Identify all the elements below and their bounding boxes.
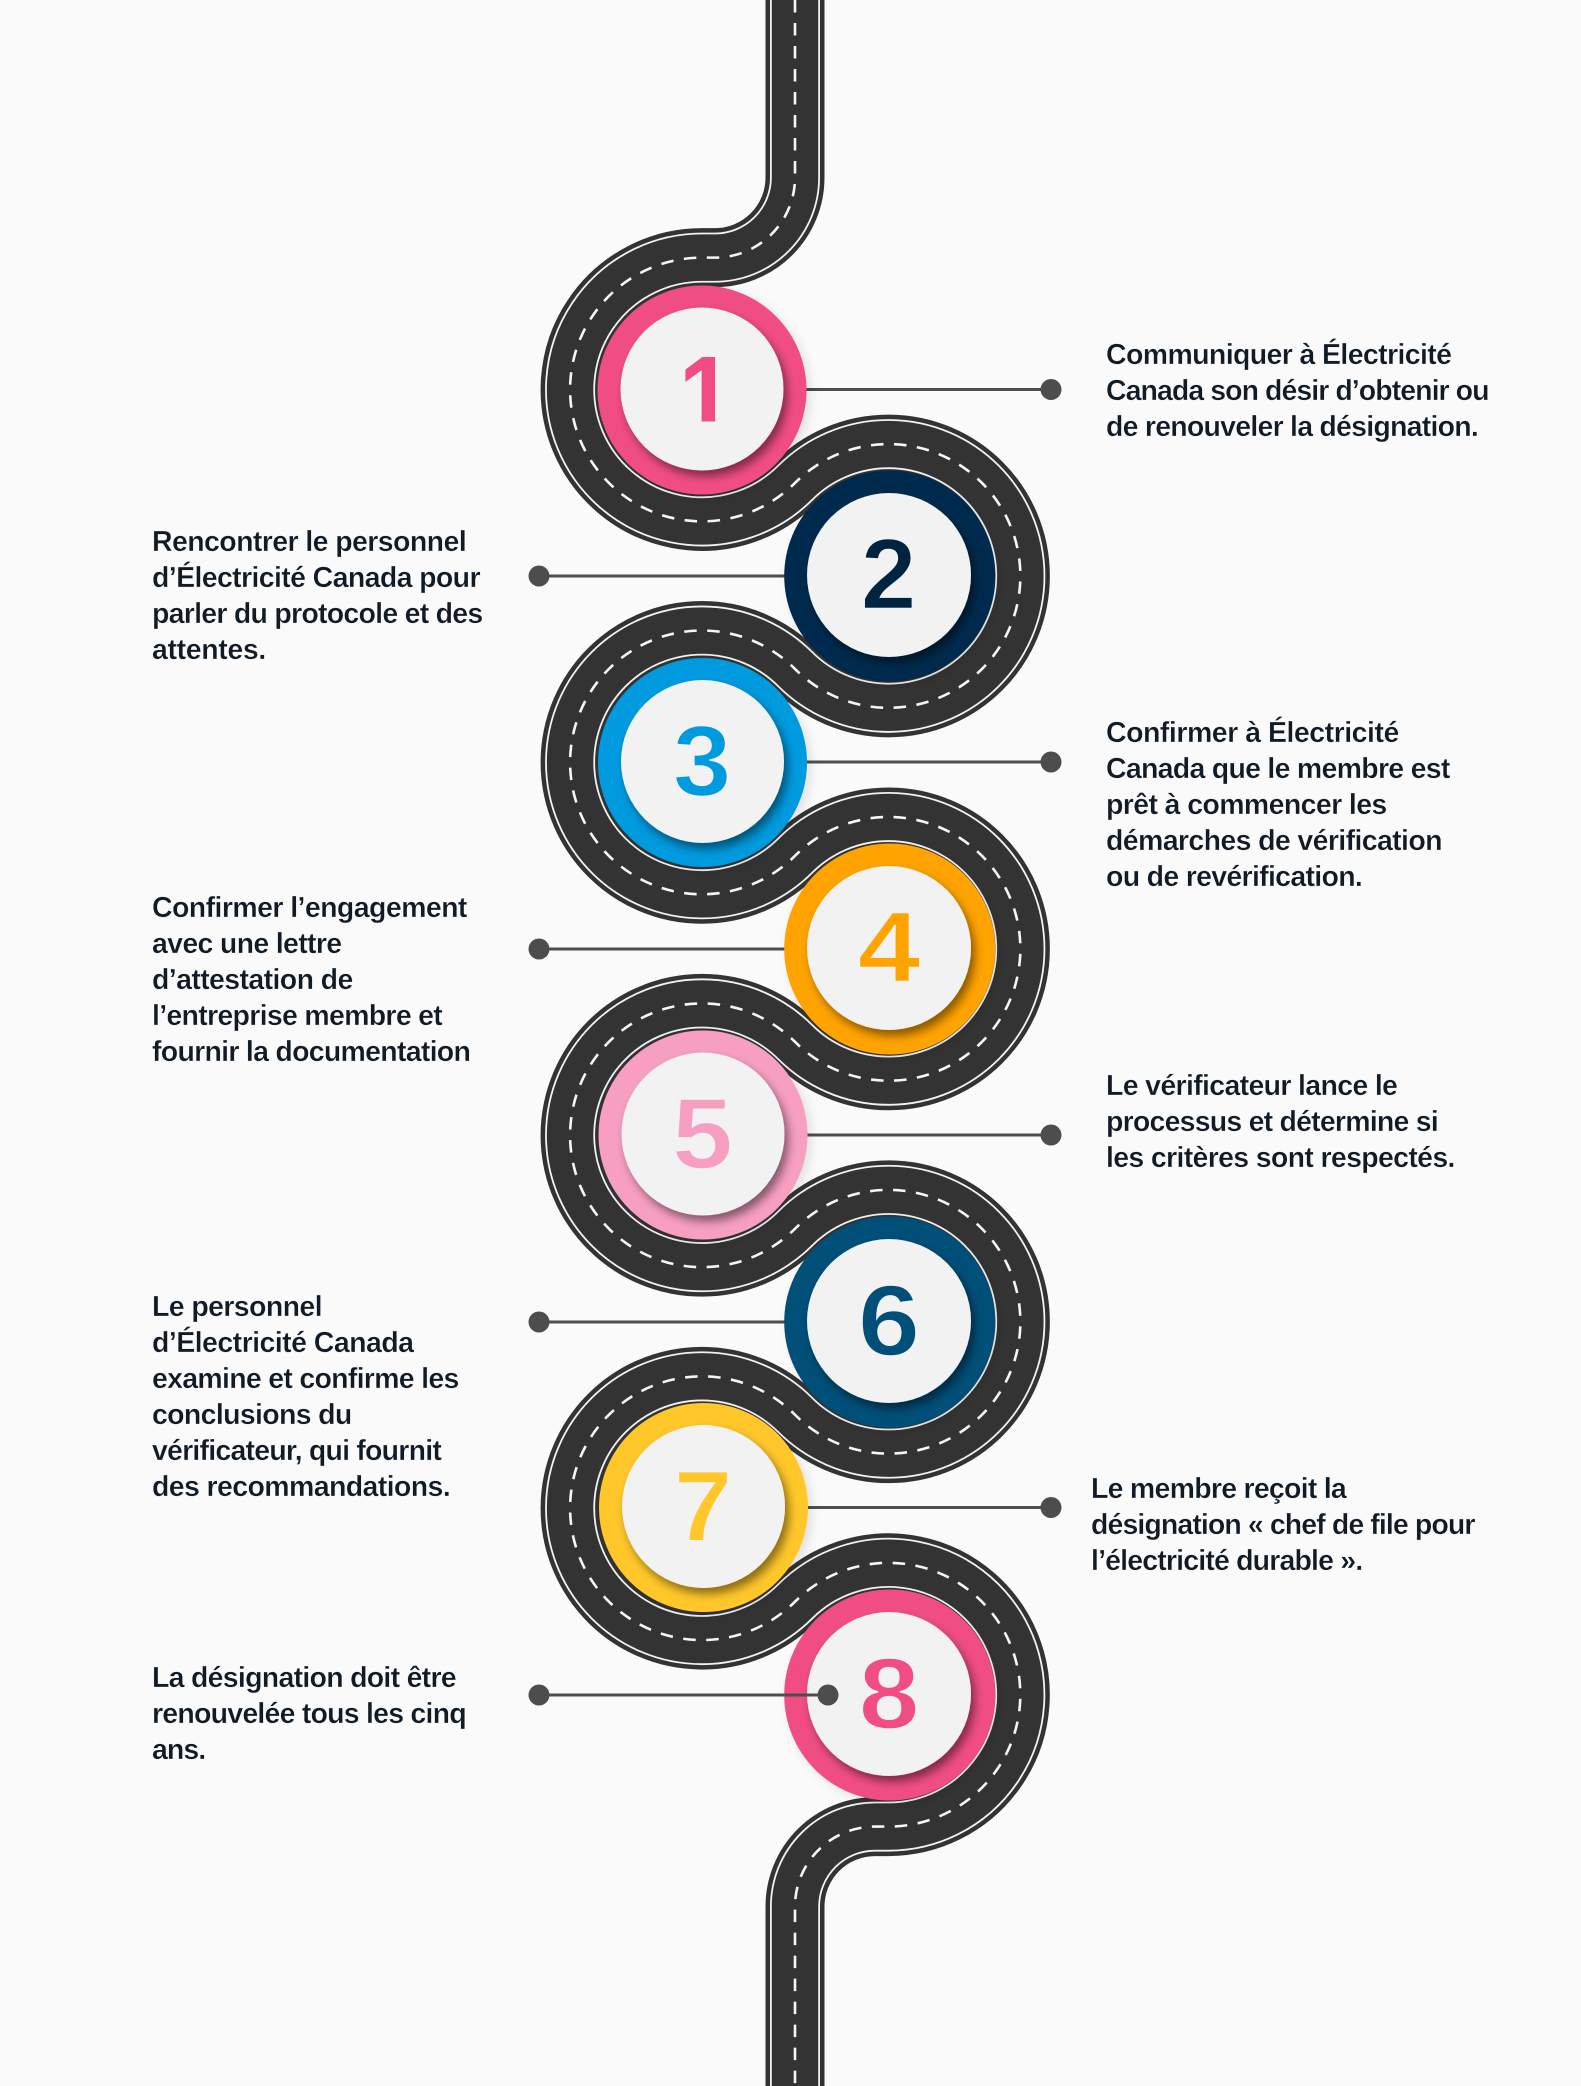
text step 5 xyxy=(1106,1070,1455,1174)
text step 2: d’Électricité Canada pour xyxy=(152,562,480,594)
text step 3: prêt à commencer les xyxy=(1106,789,1387,821)
connector step 8 xyxy=(528,1684,838,1706)
connector step 5 xyxy=(800,1124,1062,1146)
connector step 7 xyxy=(800,1497,1062,1518)
road diagram with numbered steps xyxy=(528,0,1062,2086)
text step 1: de renouveler la désignation. xyxy=(1106,411,1478,443)
text step 2: parler du protocole et des xyxy=(152,598,482,630)
text step 2: Rencontrer le personnel xyxy=(152,526,466,558)
step 8 badge xyxy=(784,1590,995,1800)
text step 7: l’électricité durable ». xyxy=(1091,1545,1362,1577)
step 1 badge xyxy=(598,286,806,494)
text step 8: ans. xyxy=(152,1734,205,1766)
text step 3: Confirmer à Électricité xyxy=(1106,717,1399,749)
step 5 badge xyxy=(598,1030,808,1240)
connector step 2 xyxy=(528,566,790,586)
text step 4: l’entreprise membre et xyxy=(152,1000,442,1032)
step 7 badge: 7 xyxy=(674,1450,732,1562)
text step 3: ou de revérification. xyxy=(1106,861,1362,893)
text step 8: La désignation doit être xyxy=(152,1662,456,1694)
text step 6 xyxy=(152,1291,459,1503)
text step 6: conclusions du xyxy=(152,1399,352,1431)
text step 3: démarches de vérification xyxy=(1106,825,1442,857)
step 3 badge xyxy=(598,658,807,867)
connector step 1 xyxy=(800,379,1062,400)
step 2 badge xyxy=(784,470,995,682)
step 2 badge: 2 xyxy=(861,518,916,630)
text step 4: avec une lettre xyxy=(152,928,341,960)
connector step 3 xyxy=(800,752,1062,772)
text step 2: attentes. xyxy=(152,634,266,666)
text step 6: d’Électricité Canada xyxy=(152,1327,413,1359)
text step 4: fournir la documentation xyxy=(152,1036,470,1068)
step 4 badge xyxy=(784,844,995,1054)
connector step 6 xyxy=(528,1312,790,1332)
text step 1 xyxy=(1106,338,1489,443)
step 7 badge xyxy=(599,1403,808,1612)
text step 3: Canada que le membre est xyxy=(1106,753,1450,785)
text step 7: désignation « chef de file pour xyxy=(1091,1509,1475,1541)
step 8 badge: 8 xyxy=(859,1638,919,1750)
winding road xyxy=(570,0,1020,2086)
text step 1: Canada son désir d’obtenir ou xyxy=(1106,375,1489,407)
text step 5: les critères sont respectés. xyxy=(1106,1142,1455,1174)
text step 1: Communiquer à Électricité xyxy=(1106,339,1451,371)
text step 3 xyxy=(1106,716,1450,893)
text step 8 xyxy=(152,1662,466,1766)
text step 7 xyxy=(1091,1473,1476,1577)
text step 6: des recommandations. xyxy=(152,1471,450,1503)
text step 6: examine et confirme les xyxy=(152,1363,459,1395)
connector step 4 xyxy=(528,938,790,960)
text step 5: Le vérificateur lance le xyxy=(1106,1070,1397,1102)
text step 5: processus et détermine si xyxy=(1106,1106,1438,1138)
text step 6: vérificateur, qui fournit xyxy=(152,1435,441,1467)
step 5 badge: 5 xyxy=(672,1079,733,1190)
text step 2 xyxy=(152,526,482,666)
step 1 badge: 1 xyxy=(679,333,733,460)
text step 6: Le personnel xyxy=(152,1291,322,1323)
step 4 badge: 4 xyxy=(858,891,920,1003)
text step 4 xyxy=(152,892,470,1068)
step 6 badge xyxy=(784,1216,995,1428)
step 6 badge: 6 xyxy=(858,1266,920,1377)
step 3 badge: 3 xyxy=(673,705,731,817)
text step 4: Confirmer l’engagement xyxy=(152,892,467,924)
text step 8: renouvelée tous les cinq xyxy=(152,1698,466,1730)
text step 4: d’attestation de xyxy=(152,964,353,996)
text step 7: Le membre reçoit la xyxy=(1091,1473,1346,1505)
